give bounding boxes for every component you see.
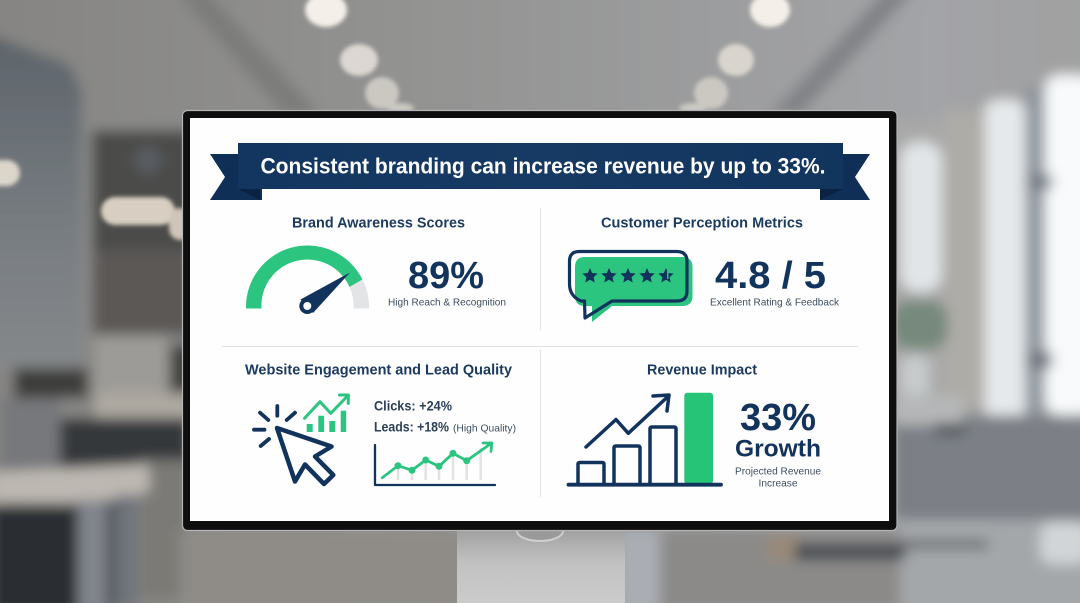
heading: customer perception metrics: Customer Perception Metrics [601,216,803,232]
ribbon band [238,143,843,189]
heading: website engagement and lead quality: Website Engagement and Lead Quality [245,362,512,378]
caption: excellent rating: Excellent Rating & Feedback [710,296,840,308]
ribbon right tail [820,154,870,200]
icon: cursor with click rays [254,406,333,484]
panel dividers [222,208,858,497]
monitor stand [457,525,625,603]
stat: leads: Leads: +18% [374,420,449,434]
value: 33%: 33% [740,397,816,439]
heading: revenue impact: Revenue Impact [647,362,757,378]
banner headline [210,143,870,200]
heading: brand awareness scores: Brand Awareness Scores [292,216,465,232]
panel: brand awareness [246,216,506,314]
panel: website engagement [245,362,516,485]
caption: high reach: High Reach & Recognition [388,296,506,308]
value: 89%: 89% [408,255,484,297]
ceiling and pendant lights [0,0,790,240]
icon: mini bar chart with arrow [304,395,348,432]
icon: speech bubble with stars [570,252,692,322]
label: growth: Growth [735,436,821,462]
line chart [375,443,495,485]
caption: projected revenue increase [735,466,821,490]
monitor frame and screen [182,110,897,530]
value: 4.8 / 5: 4.8 / 5 [715,255,826,297]
ribbon left tail [210,154,262,200]
gauge chart [246,245,369,314]
panel: customer perception [570,216,840,322]
bar chart with growth arrow [568,393,721,485]
note: high quality: (High Quality) [453,422,516,434]
caption: projected revenue increase: Increase [758,479,798,490]
caption: projected revenue increase: Projected Revenue [735,466,821,478]
stat: clicks: Clicks: +24% [374,398,452,414]
headline text: Consistent branding can increase revenue by up to 33%. [260,154,826,178]
panel: revenue impact [568,362,821,490]
